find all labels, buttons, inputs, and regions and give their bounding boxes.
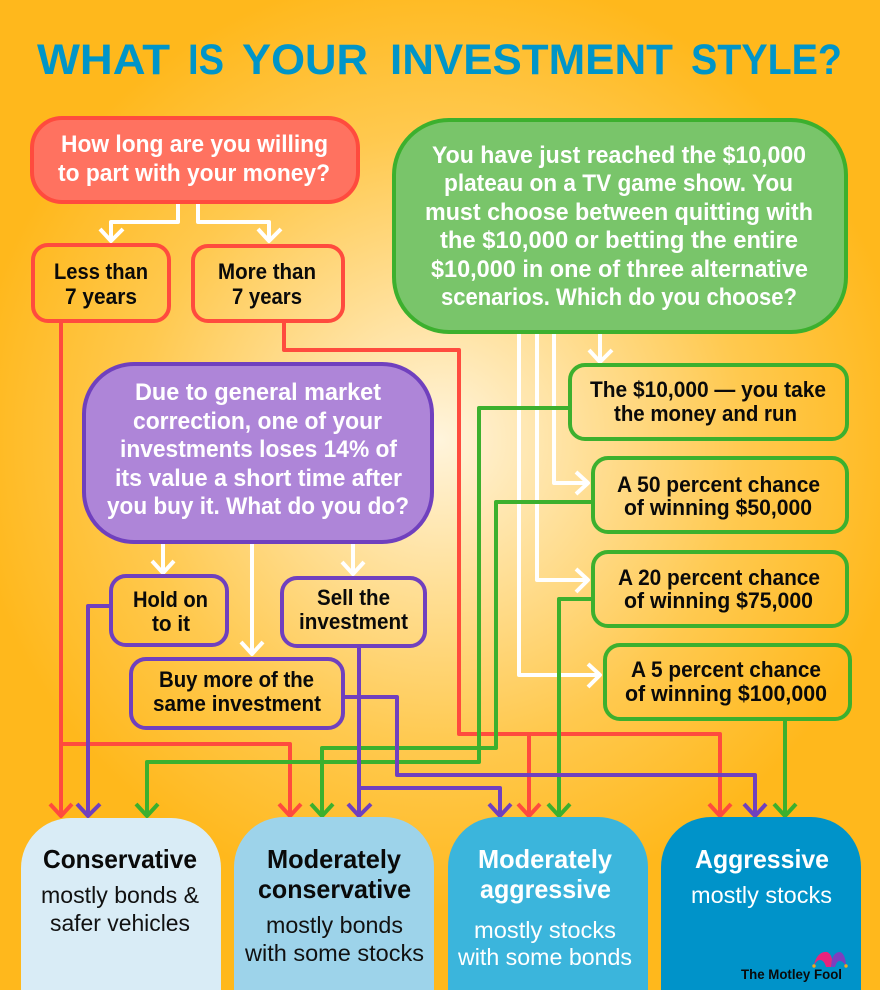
- result card: aggressive: mostly stocks: [691, 882, 832, 908]
- panel: market correction question: correction, one of your: [133, 408, 382, 435]
- answer: 5 percent chance: of winning $100,000: [625, 681, 827, 706]
- result card: moderately aggressive: mostly stocks: [474, 917, 616, 943]
- green connectors: [136, 408, 796, 816]
- answer: more than 7 years: More than: [218, 259, 316, 284]
- answer: less than 7 years: 7 years: [65, 284, 137, 309]
- result card: moderately aggressive: with some bonds: [457, 944, 632, 970]
- red connectors: [50, 321, 731, 816]
- answer: buy more: [131, 659, 343, 728]
- answer: buy more: same investment: [153, 691, 322, 716]
- answer: take the money: the money and run: [614, 401, 797, 426]
- white arrows: time question to answers: [100, 203, 281, 241]
- answer: sell the investment: investment: [299, 609, 409, 634]
- result card: moderately aggressive: Moderately: [478, 844, 613, 874]
- result card: conservative: [21, 818, 221, 990]
- result card: moderately conservative: Moderately: [267, 844, 402, 874]
- result card: moderately aggressive: aggressive: [480, 874, 611, 904]
- panel: time horizon question: [32, 118, 358, 202]
- answer: hold on to it: to it: [152, 611, 191, 636]
- answer: less than 7 years: Less than: [54, 259, 148, 284]
- panel: time horizon question: to part with your money?: [58, 160, 330, 187]
- answer: 5 percent chance: [605, 645, 850, 719]
- panel: game show question: You have just reached the $10,000: [432, 142, 806, 169]
- result card: moderately conservative: with some stocks: [244, 940, 424, 966]
- answer: 50 percent chance: A 50 percent chance: [617, 472, 820, 497]
- answer: hold on to it: [111, 576, 227, 645]
- title: WHAT: [37, 36, 170, 84]
- answer: more than 7 years: 7 years: [232, 284, 302, 309]
- panel: market correction question: [84, 364, 432, 542]
- panel: game show question: $10,000 in one of three alternative: [431, 256, 808, 283]
- result card: conservative: Conservative: [43, 844, 197, 874]
- panel: market correction question: its value a short time after: [115, 465, 402, 492]
- answer: take the money: [570, 365, 847, 439]
- result card: moderately conservative: [234, 817, 434, 990]
- logo: The Motley Fool: [741, 952, 848, 982]
- icon: jester hat: [812, 952, 848, 968]
- answer: hold on to it: Hold on: [133, 587, 208, 612]
- panel: game show question: must choose between quitting with: [425, 199, 813, 226]
- title: [37, 36, 842, 84]
- answer: less than 7 years: [33, 245, 169, 321]
- white arrows: game show question to answers: [519, 333, 612, 687]
- title: STYLE?: [691, 36, 842, 84]
- panel: market correction question: Due to general market: [135, 379, 381, 406]
- title: INVESTMENT: [390, 36, 673, 84]
- answer: more than 7 years: [193, 246, 343, 321]
- result card: aggressive: Aggressive: [695, 844, 829, 874]
- title: YOUR: [242, 36, 368, 84]
- white arrows: market correction question to answers: [152, 543, 364, 654]
- answer: 50 percent chance: of winning $50,000: [624, 495, 812, 520]
- purple connectors: [77, 606, 766, 816]
- title: IS: [188, 36, 224, 84]
- panel: market correction question: you buy it. What do you do?: [107, 493, 409, 520]
- answer: sell the investment: [282, 578, 425, 646]
- answer: take the money: The $10,000 — you take: [590, 377, 826, 402]
- logo: The Motley Fool: The Motley Fool: [741, 966, 842, 982]
- panel: game show question: plateau on a TV game show. You: [444, 170, 793, 197]
- result card: conservative: mostly bonds &: [41, 882, 199, 908]
- panel: game show question: scenarios. Which do you choose?: [441, 284, 797, 311]
- result card: moderately conservative: conservative: [258, 874, 411, 904]
- answer: 20 percent chance: of winning $75,000: [624, 588, 813, 613]
- answer: buy more: Buy more of the: [159, 667, 314, 692]
- result card: moderately aggressive: [448, 817, 648, 990]
- result card: conservative: safer vehicles: [50, 910, 190, 936]
- panel: game show question: [394, 120, 846, 332]
- panel: time horizon question: How long are you willing: [61, 131, 328, 158]
- result card: aggressive: [661, 817, 861, 990]
- result card: moderately conservative: mostly bonds: [266, 912, 403, 938]
- answer: sell the investment: Sell the: [317, 585, 390, 610]
- panel: market correction question: investments loses 14% of: [120, 436, 398, 463]
- panel: game show question: the $10,000 or betting the entire: [440, 227, 798, 254]
- answer: 20 percent chance: A 20 percent chance: [618, 565, 820, 590]
- answer: 20 percent chance: [593, 552, 847, 626]
- answer: 50 percent chance: [593, 458, 847, 532]
- answer: 5 percent chance: A 5 percent chance: [631, 657, 821, 682]
